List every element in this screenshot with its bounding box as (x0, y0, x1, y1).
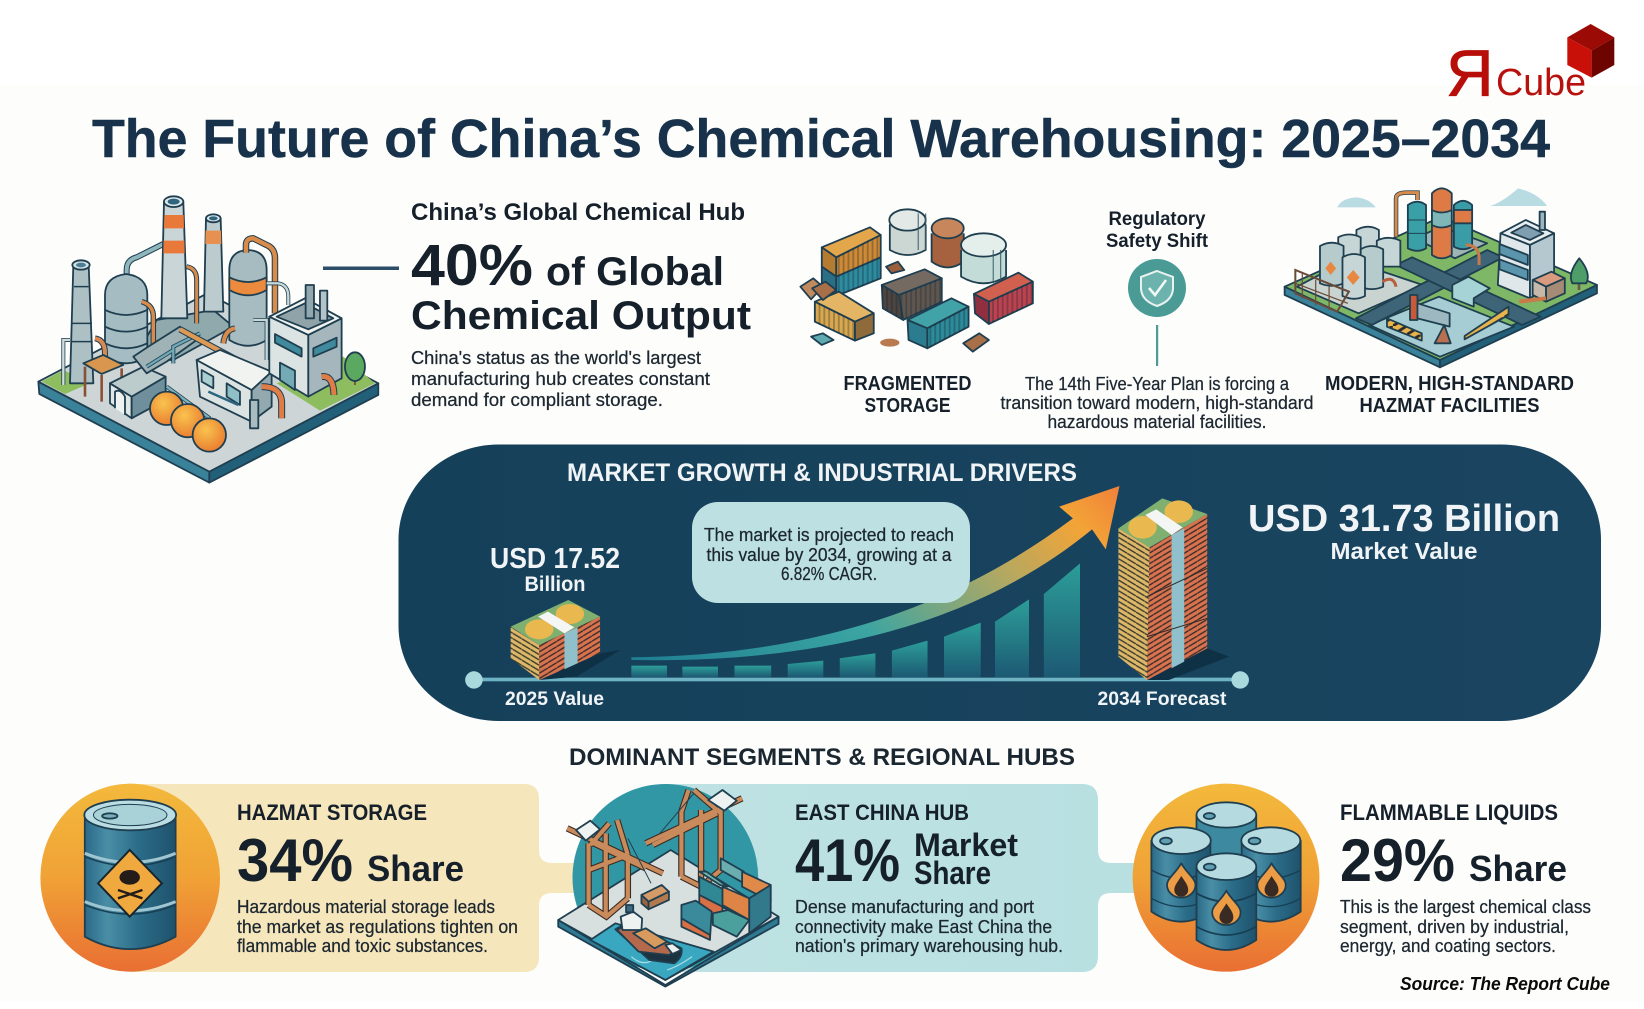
hub body text (411, 348, 710, 410)
logo wordmark: Cube (1496, 62, 1586, 104)
east china body text: Dense manufacturing and port (795, 897, 1034, 917)
timeline labels: 2034 Forecast (1098, 689, 1227, 710)
flammable statistic: Share (1469, 848, 1567, 889)
logo wordmark (1446, 36, 1586, 110)
hub heading: China’s Global Chemical Hub (411, 199, 745, 226)
callout: CAGR bubble (692, 502, 970, 603)
2034 market value: USD 31.73 Billion (1248, 498, 1560, 540)
modern facilities label: HAZMAT FACILITIES (1360, 395, 1540, 417)
hazmat body text (237, 897, 518, 956)
callout: CAGR bubble: this value by 2034, growing at a (706, 545, 952, 565)
title: The Future of China’s Chemical Warehousing: 2025–2034 (92, 109, 1550, 169)
flammable body text: energy, and coating sectors. (1340, 936, 1556, 956)
panel: flammable liquids (1133, 784, 1591, 972)
icon: fragmented storage containers (800, 209, 1033, 352)
hazmat body text: the market as regulations tighten on (237, 917, 518, 937)
connector line (323, 266, 399, 270)
teal card and connector (665, 784, 1140, 972)
hazmat heading: HAZMAT STORAGE (237, 800, 427, 825)
flammable body text: segment, driven by industrial, (1340, 917, 1569, 937)
40% statistic: 40% (411, 233, 533, 298)
flammable heading: FLAMMABLE LIQUIDS (1340, 800, 1558, 825)
flammable body text (1340, 897, 1591, 956)
40% statistic (411, 233, 751, 338)
hazmat statistic (237, 827, 464, 894)
east china body text: nation's primary warehousing hub. (795, 936, 1063, 956)
east china statistic (795, 827, 1018, 894)
2025 value label: Billion (524, 573, 586, 596)
regulatory heading: Regulatory (1108, 209, 1206, 230)
yellow card and connector (130, 784, 580, 972)
callout: CAGR bubble: 6.82% CAGR. (781, 564, 877, 584)
logo: RCube (1446, 24, 1614, 110)
40% statistic: of Global (546, 250, 724, 294)
fragmented storage label: STORAGE (864, 395, 950, 417)
source note: Source: The Report Cube (1400, 974, 1610, 994)
timeline labels (505, 689, 1227, 710)
icon: shield check (1128, 259, 1186, 317)
icon: port and cranes (558, 784, 779, 987)
panel: market growth (398, 444, 1601, 721)
2025 value label (490, 543, 620, 596)
icon: large cash stack (1118, 498, 1229, 680)
hazmat body text: flammable and toxic substances. (237, 936, 488, 956)
regulatory heading (1106, 209, 1209, 252)
callout: CAGR bubble: The market is projected to reach (704, 525, 954, 545)
east china body text (795, 897, 1063, 956)
2034 market value (1248, 498, 1560, 564)
regulatory body text: hazardous material facilities. (1048, 412, 1266, 432)
logo cube icon (1567, 24, 1614, 78)
40% statistic: Chemical Output (411, 294, 751, 338)
regulatory body text: The 14th Five-Year Plan is forcing a (1025, 374, 1290, 394)
timeline labels: 2025 Value (505, 689, 604, 710)
panel: hazmat storage (40, 784, 580, 972)
flammable statistic: 29% (1340, 827, 1455, 894)
regulatory safety shift (1000, 209, 1314, 432)
hub body text: manufacturing hub creates constant (411, 369, 710, 389)
fragmented storage label: FRAGMENTED (844, 373, 972, 395)
logo wordmark: Я (1446, 36, 1494, 110)
icon: chemical plant (38, 196, 378, 483)
market heading: MARKET GROWTH & INDUSTRIAL DRIVERS (567, 459, 1077, 487)
hub body text: demand for compliant storage. (411, 390, 663, 410)
fragmented storage label (844, 373, 972, 417)
section heading: DOMINANT SEGMENTS & REGIONAL HUBS (569, 744, 1075, 771)
icon: modern hazmat facility (1285, 188, 1597, 367)
flammable statistic (1340, 827, 1567, 894)
text block: global chemical hub (411, 199, 751, 410)
2025 value label: USD 17.52 (490, 543, 620, 575)
modern facilities label: MODERN, HIGH-STANDARD (1325, 373, 1574, 395)
icon: toxic barrel (40, 784, 220, 972)
panel background (398, 444, 1601, 721)
modern facilities label (1325, 373, 1574, 417)
east china heading: EAST CHINA HUB (795, 800, 969, 825)
growth chart: bars, arrow, timeline (465, 486, 1249, 689)
icon: flammable barrels (1133, 784, 1319, 972)
hazmat body text: Hazardous material storage leads (237, 897, 495, 917)
icon: small cash stack (511, 600, 620, 680)
hub body text: China's status as the world's largest (411, 348, 701, 368)
hazmat statistic: Share (367, 848, 464, 889)
2034 market value: Market Value (1330, 538, 1478, 564)
regulatory heading: Safety Shift (1106, 231, 1209, 252)
panel: east china hub (558, 784, 1140, 987)
east china statistic: 41% (795, 827, 900, 894)
vertical connector (1156, 325, 1158, 366)
flammable body text: This is the largest chemical class (1340, 897, 1591, 917)
hazmat statistic: 34% (237, 827, 353, 894)
east china statistic: Share (914, 855, 991, 891)
east china statistic: Market (914, 827, 1018, 863)
regulatory body text (1000, 374, 1314, 432)
regulatory body text: transition toward modern, high-standard (1000, 393, 1314, 413)
east china body text: connectivity make East China the (795, 917, 1052, 937)
